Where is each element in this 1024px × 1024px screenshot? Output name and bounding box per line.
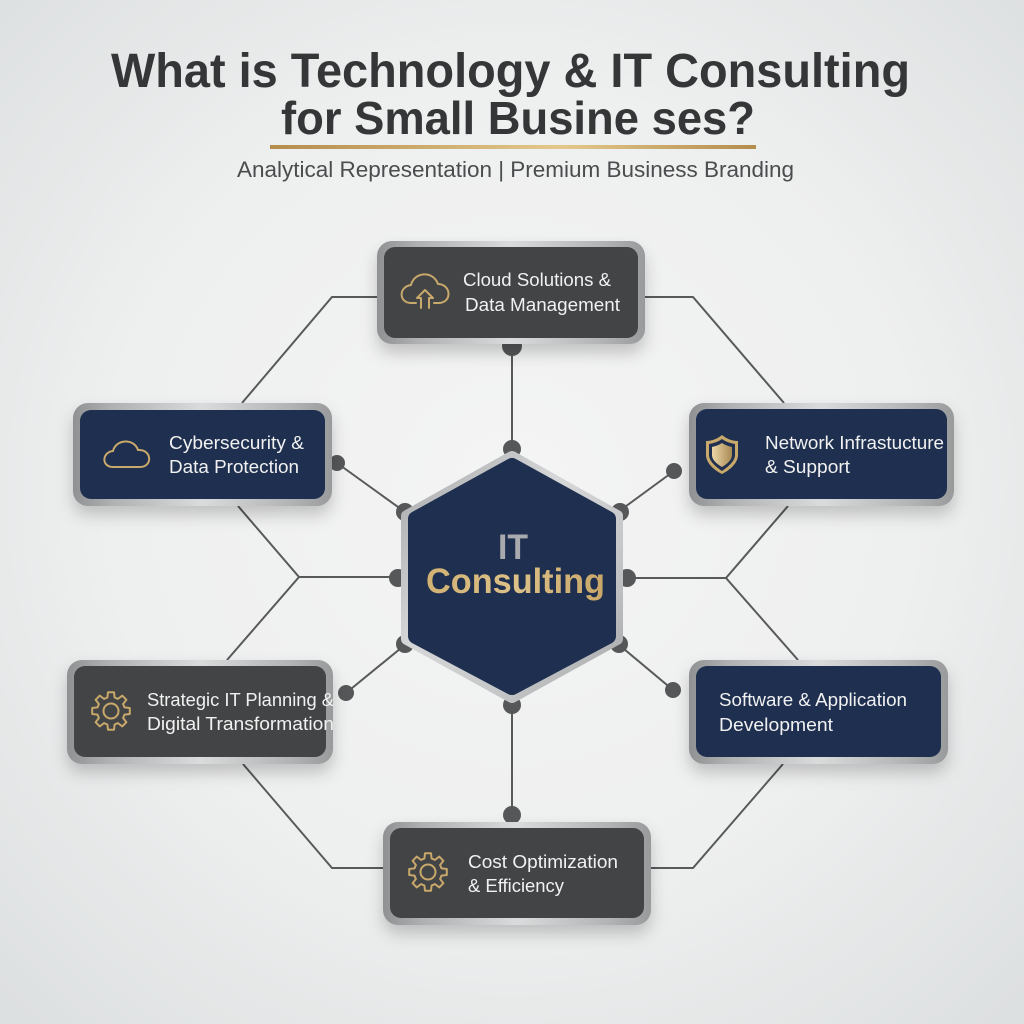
title (111, 45, 910, 144)
card text (468, 851, 618, 896)
hexagon label: IT (498, 528, 528, 567)
card text (169, 432, 305, 477)
card text (719, 689, 907, 735)
subtitle: Analytical Representation | Premium Business Branding (237, 157, 794, 182)
card text: & Efficiency (468, 875, 565, 896)
card text (765, 432, 944, 477)
card text: & Support (765, 456, 850, 477)
card text: Strategic IT Planning & (147, 689, 335, 710)
central hexagon (407, 457, 617, 697)
hexagon label: Consulting (426, 562, 605, 601)
card text: Data Protection (169, 456, 299, 477)
card: software (689, 660, 948, 764)
card: cost optimization (383, 822, 651, 925)
icon: gear (409, 853, 447, 891)
icon: gear (92, 692, 130, 730)
icon: shield (706, 435, 738, 474)
card text (463, 269, 620, 315)
card: cloud solutions (377, 241, 645, 344)
card text (147, 689, 335, 734)
hexagon label (426, 528, 605, 601)
card: cybersecurity (73, 403, 332, 506)
card text: Cloud Solutions & (463, 269, 612, 290)
card text: Network Infrastucture (765, 432, 944, 453)
card text: Software & Application (719, 689, 907, 710)
card text: Cost Optimization (468, 851, 618, 872)
card: network (689, 403, 954, 506)
title: What is Technology & IT Consulting (111, 45, 910, 98)
card text: Cybersecurity & (169, 432, 305, 453)
title underline (270, 145, 756, 149)
title: for Small Busine ses? (281, 92, 755, 144)
card text: Data Management (465, 294, 620, 315)
icon: cloud upload (402, 274, 449, 308)
card: strategic planning (67, 660, 335, 764)
connector nodes (329, 336, 682, 824)
card text: Digital Transformation (147, 713, 334, 734)
connector network (227, 297, 798, 868)
card text: Development (719, 714, 833, 735)
icon: cloud (104, 441, 149, 467)
